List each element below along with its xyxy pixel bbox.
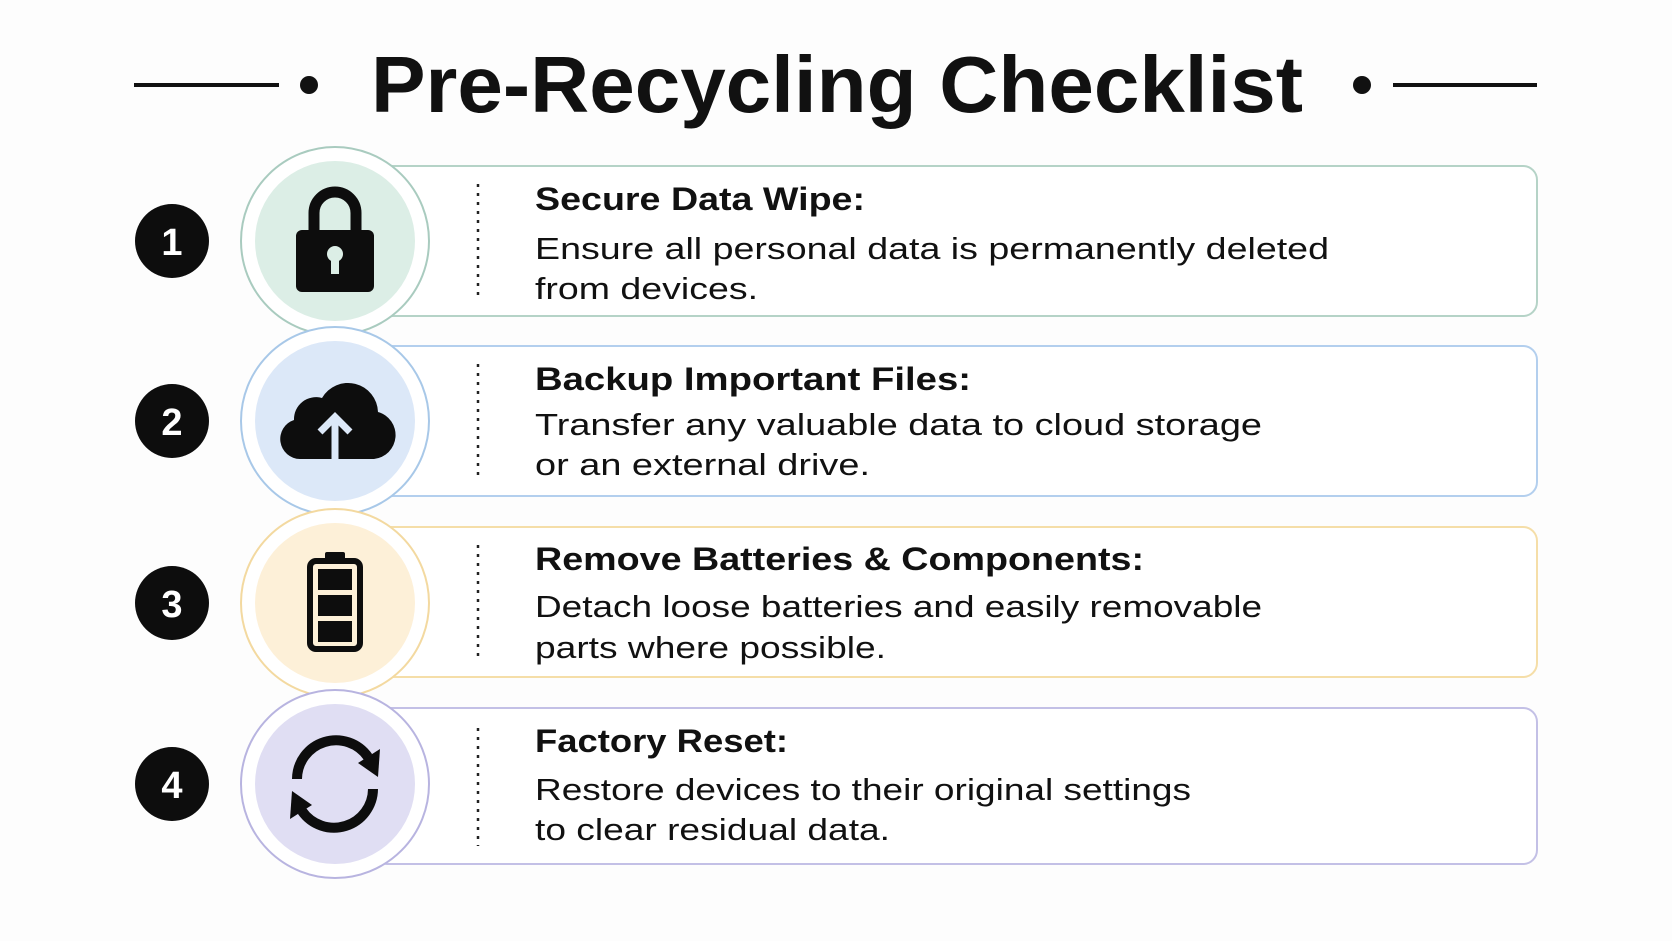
text 2: Transfer any valuable data to cloud storage (535, 407, 1262, 442)
text 3 (535, 541, 1262, 665)
title: Pre-Recycling Checklist (371, 40, 1303, 129)
text 4: Restore devices to their original settings (535, 772, 1191, 807)
text 3: parts where possible. (535, 630, 886, 665)
text 3: Detach loose batteries and easily removable (535, 589, 1262, 624)
title (134, 40, 1537, 129)
number badge 4: 4 (161, 765, 183, 807)
icon: refresh (241, 690, 429, 878)
card 2 (373, 346, 1537, 496)
text 2: or an external drive. (535, 447, 870, 482)
number badge 4 (135, 747, 209, 821)
text 4 (535, 723, 1191, 847)
number badge 3 (135, 566, 209, 640)
number badge 2: 2 (161, 402, 183, 444)
number badge 1: 1 (161, 222, 183, 264)
text 1 (535, 181, 1329, 306)
text 3: Remove Batteries & Components: (535, 541, 1144, 577)
row 4: factory reset (135, 690, 1537, 878)
text 1: Ensure all personal data is permanently deleted (535, 231, 1329, 266)
text 2 (535, 361, 1262, 482)
row 3: batteries (135, 509, 1537, 697)
row 2: backup (135, 327, 1537, 515)
icon: cloud upload (241, 327, 429, 515)
icon: lock (241, 147, 429, 335)
number badge 3: 3 (161, 584, 183, 626)
number badge 2 (135, 384, 209, 458)
text 4: Factory Reset: (535, 723, 788, 759)
card 4 (373, 708, 1537, 864)
card 1 (373, 166, 1537, 316)
text 1: Secure Data Wipe: (535, 181, 865, 217)
row 1: secure data wipe (135, 147, 1537, 335)
text 2: Backup Important Files: (535, 361, 971, 397)
icon: battery (241, 509, 429, 697)
card 3 (373, 527, 1537, 677)
text 1: from devices. (535, 271, 758, 306)
text 4: to clear residual data. (535, 812, 890, 847)
number badge 1 (135, 204, 209, 278)
